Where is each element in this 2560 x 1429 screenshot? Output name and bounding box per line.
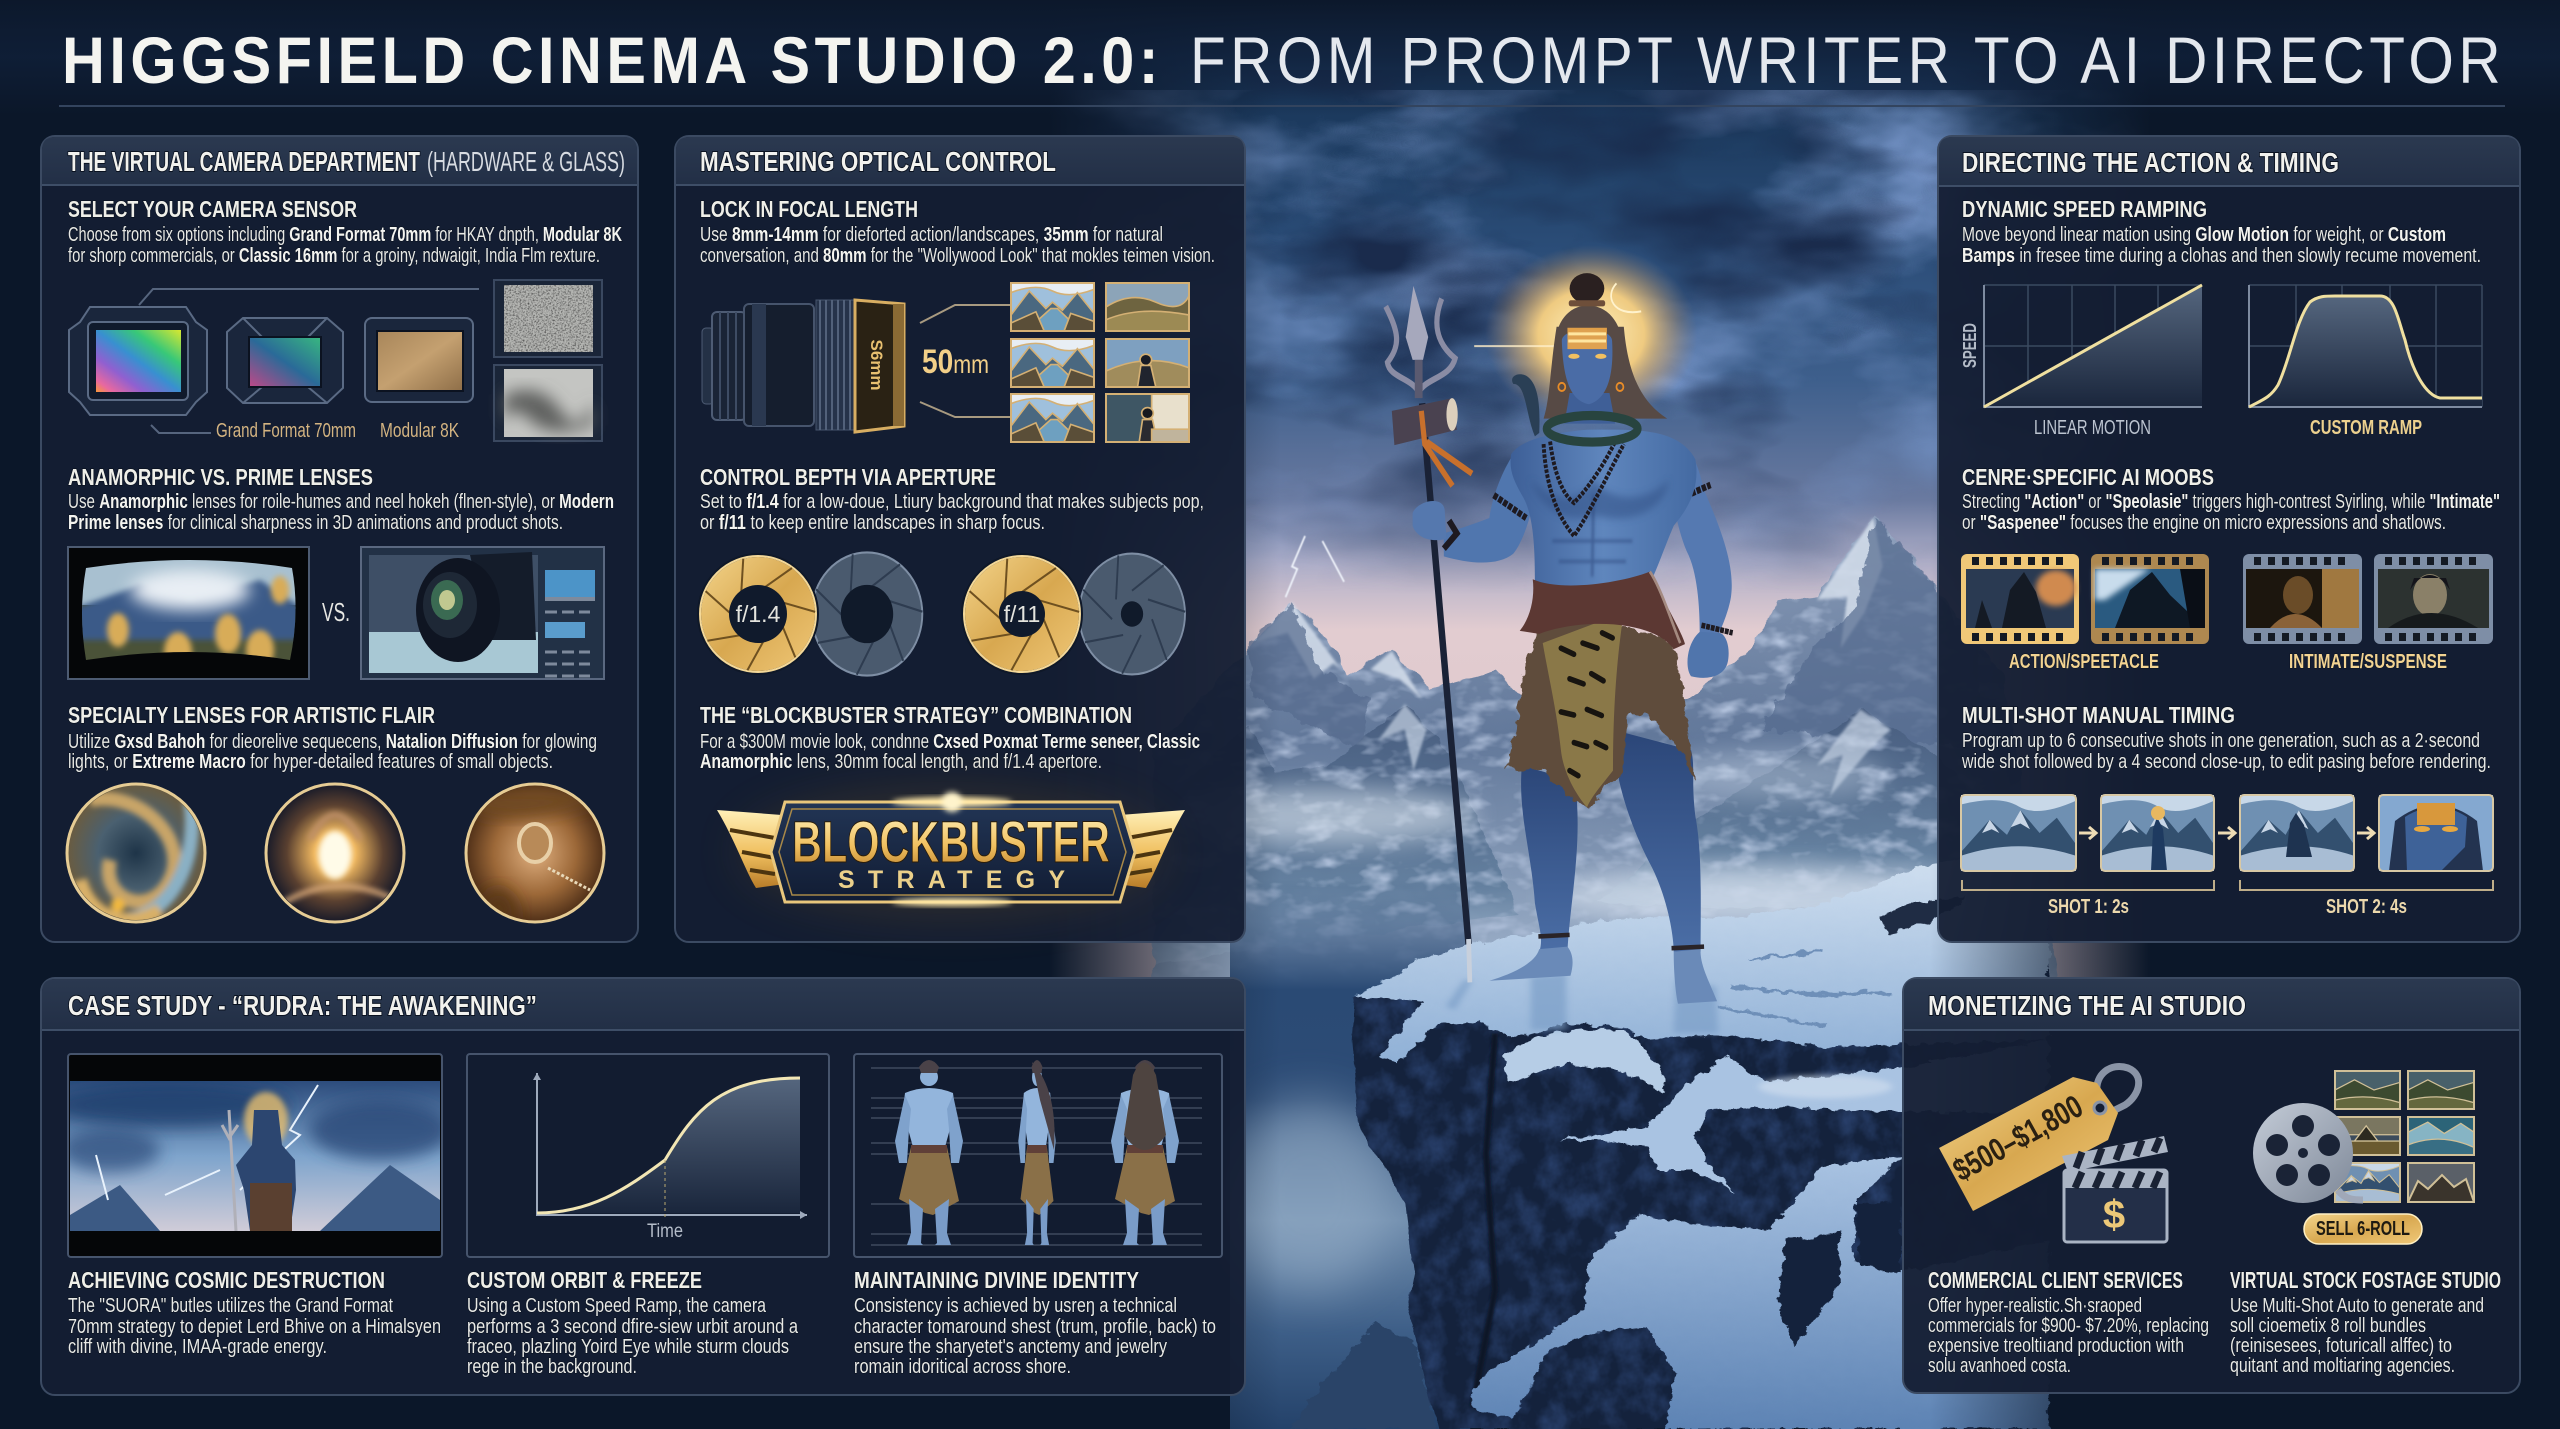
text block: virtual stock footage studio: soll cioemetix 8 roll bundles bbox=[2230, 1315, 2426, 1337]
panel: the virtual camera department bbox=[41, 136, 638, 942]
text block: anamorphic vs prime lenses bbox=[68, 464, 614, 534]
text block: blockbuster strategy combination: Anamorphic lens, 30mm focal length, and f/1.4 apertore. bbox=[700, 751, 1102, 773]
icon: clapperboard with dollar bbox=[2062, 1136, 2168, 1242]
text block: custom orbit and freeze bbox=[467, 1267, 799, 1378]
icon: camera sensors: Modular 8K bbox=[380, 420, 460, 442]
title: HIGGSFIELD CINEMA STUDIO 2.0: bbox=[62, 23, 1163, 97]
text block: custom orbit and freeze: performs a 3 second dfire-siew urbit around a bbox=[467, 1316, 799, 1338]
icon: film reel with stock clips bbox=[2253, 1071, 2474, 1203]
image: character turnaround sheet bbox=[854, 1054, 1222, 1257]
badge: blockbuster strategy: BLOCKBUSTER bbox=[792, 810, 1110, 875]
icon: golden halo bbox=[1474, 245, 1698, 424]
text block: maintaining divine identity: character tomaround shest (trum, profile, back) to bbox=[854, 1316, 1216, 1338]
text block: maintaining divine identity: romain idoritical across shore. bbox=[854, 1356, 1071, 1378]
text block: commercial client services: solu avanhoed costa. bbox=[1928, 1355, 2071, 1377]
text block: custom orbit and freeze: rege in the background. bbox=[467, 1356, 637, 1378]
badge: sell b-roll pill bbox=[2304, 1214, 2422, 1244]
text block: commercial client services bbox=[1928, 1267, 2209, 1377]
text block: maintaining divine identity: MAINTAINING DIVINE IDENTITY bbox=[854, 1267, 1139, 1293]
text block: specialty lenses: lights, or Extreme Macro for hyper-detailed features of small objects. bbox=[68, 751, 553, 773]
text block: genre specific AI moods: or "Saspenee" focuses the engine on micro expressions and shatlows. bbox=[1962, 512, 2446, 534]
torso bbox=[1511, 430, 1696, 588]
text block: genre specific AI moods bbox=[1962, 464, 2500, 534]
icon: swirl bokeh lens bbox=[67, 784, 205, 922]
text block: anamorphic vs prime lenses: Prime lenses for clinical sharpness in 3D animations and product shots. bbox=[68, 512, 563, 534]
icon: price tag: $500–$1,800 bbox=[1947, 1088, 2089, 1188]
icon: trident and damaru staff bbox=[1386, 286, 1472, 982]
icon: aperture f/1.4 open: f/1.4 bbox=[736, 601, 781, 627]
image: intimate and suspense film strips bbox=[2243, 554, 2493, 673]
icon: aperture f/11 narrow: f/11 bbox=[1004, 601, 1040, 627]
icon: film grain swatches bbox=[494, 280, 602, 441]
heading: (HARDWARE & GLASS) bbox=[427, 146, 625, 177]
text block: virtual stock footage studio: Use Multi-Shot Auto to generate and bbox=[2230, 1295, 2484, 1317]
icon: camera sensors: Grand Format 70mm bbox=[216, 420, 356, 442]
text block: blockbuster strategy combination bbox=[700, 702, 1200, 773]
image: action and spectacle film strips: ACTION/SPEETACLE bbox=[2009, 651, 2159, 673]
chart: custom orbit speed curve bbox=[467, 1054, 829, 1257]
text block: commercial client services: COMMERCIAL CLIENT SERVICES bbox=[1928, 1267, 2183, 1293]
badge: blockbuster strategy: STRATEGY bbox=[838, 866, 1065, 894]
text block: virtual stock footage studio: (reinisesees, foturicall alffec) to bbox=[2230, 1335, 2452, 1357]
neck, serpent and head bbox=[1512, 273, 1641, 442]
text block: select your camera sensor: Choose from six options including Grand Format 70mm for HKAY dnpth, Modular 8K bbox=[68, 224, 622, 246]
image: action and spectacle film strips bbox=[1961, 554, 2209, 673]
text block: anamorphic vs prime lenses: Use Anamorphic lenses for roile-humes and neel hokeh (flnen-style), or Modern bbox=[68, 491, 614, 513]
text block: blockbuster strategy combination: THE “BLOCKBUSTER STRATEGY” COMBINATION bbox=[700, 702, 1132, 728]
lower valley mist bbox=[1230, 880, 1470, 1429]
text block: control depth via aperture: CONTROL BEPTH VIA APERTURE bbox=[700, 464, 996, 490]
image: anamorphic lens view bbox=[68, 547, 309, 679]
heading: MASTERING OPTICAL CONTROL bbox=[700, 146, 1056, 177]
text block: blockbuster strategy combination: For a $300M movie look, condnne Cxsed Poxmat Terme seneer, Classic bbox=[700, 731, 1200, 753]
badge: blockbuster strategy bbox=[717, 790, 1185, 914]
text block: dynamic speed ramping bbox=[1962, 196, 2481, 267]
text block: control depth via aperture: or f/11 to keep entire landscapes in sharp focus. bbox=[700, 512, 1045, 534]
text block: custom orbit and freeze: Using a Custom Speed Ramp, the camera bbox=[467, 1295, 767, 1317]
icon: camera sensors bbox=[69, 289, 479, 442]
text block: dynamic speed ramping: Move beyond linear mation using Glow Motion for weight, or Custom bbox=[1962, 224, 2446, 246]
text block: maintaining divine identity bbox=[854, 1267, 1216, 1378]
chart: custom orbit speed curve: Time bbox=[647, 1221, 683, 1242]
icon: aperture f/1.4 open bbox=[699, 552, 922, 676]
icon: 50mm lens: S6mm bbox=[867, 339, 886, 391]
image grid: focal length samples bbox=[1011, 283, 1235, 442]
text block: maintaining divine identity: ensure the sharyetet's anctemy and jewelry bbox=[854, 1336, 1167, 1358]
text block: select your camera sensor: SELECT YOUR CAMERA SENSOR bbox=[68, 196, 357, 222]
text block: achieving cosmic destruction: The "SUORA" butles utilizes the Grand Format bbox=[68, 1295, 393, 1317]
storyboard: shot sequence with arrows: SHOT 2: 4s bbox=[2326, 896, 2407, 918]
icon: 50mm lens bbox=[702, 300, 1011, 432]
icon: clapperboard with dollar: $ bbox=[2103, 1193, 2125, 1237]
text block: specialty lenses: Utilize Gxsd Bahoh for dieorelive sequecens, Natalion Diffusion for glowing bbox=[68, 731, 597, 753]
icon: diffusion glow lens bbox=[266, 784, 404, 922]
text block: lock in focal length: conversation, and 80mm for the "Wollywood Look" that mokles teimen vision. bbox=[700, 245, 1215, 267]
text block: anamorphic vs prime lenses: ANAMORPHIC VS. PRIME LENSES bbox=[68, 464, 373, 490]
chart: linear motion: LINEAR MOTION bbox=[2034, 417, 2151, 439]
label: vs: VS. bbox=[322, 597, 350, 627]
text block: dynamic speed ramping: DYNAMIC SPEED RAMPING bbox=[1962, 196, 2207, 222]
heading: THE VIRTUAL CAMERA DEPARTMENT bbox=[68, 146, 420, 177]
heading: CASE STUDY - “RUDRA: THE AWAKENING” bbox=[68, 990, 537, 1021]
chart: linear motion bbox=[1960, 285, 2202, 439]
text block: multi-shot manual timing bbox=[1961, 702, 2491, 773]
text block: achieving cosmic destruction: 70mm strategy to depiet Lerd Bhive on a Himalsyen bbox=[68, 1316, 441, 1338]
image: film still of Shiva in lightning bbox=[50, 1054, 450, 1257]
panel: directing the action and timing bbox=[1938, 136, 2520, 942]
text block: specialty lenses bbox=[68, 702, 597, 773]
panel: monetizing the AI studio bbox=[1903, 978, 2520, 1393]
image: intimate and suspense film strips: INTIMATE/SUSPENSE bbox=[2289, 651, 2447, 673]
badge: sell b-roll pill: SELL 6-ROLL bbox=[2316, 1218, 2410, 1240]
storyboard: shot sequence with arrows bbox=[1961, 795, 2493, 918]
back hair bbox=[1544, 327, 1667, 419]
text block: maintaining divine identity: Consistency is achieved by usreŋ a technical bbox=[854, 1295, 1177, 1317]
right arm and fist bbox=[1665, 444, 1733, 678]
storyboard: shot sequence with arrows: SHOT 1: 2s bbox=[2048, 896, 2129, 918]
legs bbox=[1489, 730, 1717, 1004]
icon: extreme macro lens bbox=[466, 784, 604, 930]
panel: mastering optical control bbox=[675, 136, 1245, 942]
tiger skin garment bbox=[1508, 572, 1695, 807]
text block: achieving cosmic destruction: ACHIEVING COSMIC DESTRUCTION bbox=[68, 1267, 385, 1293]
text block: lock in focal length bbox=[700, 196, 1215, 267]
text block: genre specific AI moods: Strecting "Action" or "Speolasie" triggers high-contrest Syirling, while "Intimate" bbox=[1962, 491, 2500, 513]
text block: lock in focal length: LOCK IN FOCAL LENGTH bbox=[700, 196, 918, 222]
text block: achieving cosmic destruction: cliff with divine, IMAA-grade energy. bbox=[68, 1336, 327, 1358]
text block: lock in focal length: Use 8mm-14mm for dieforted action/landscapes, 35mm for natural bbox=[700, 224, 1163, 246]
text block: custom orbit and freeze: CUSTOM ORBIT & FREEZE bbox=[467, 1267, 702, 1293]
image: modern prime lens camera bbox=[361, 547, 604, 679]
text block: control depth via aperture: Set to f/1.4 for a low-doue, Ltiury background that makes subjects pop, bbox=[700, 491, 1204, 513]
icon: aperture f/11 narrow bbox=[963, 554, 1185, 674]
text block: commercial client services: Offer hyper-realistic.Sh·sraoped bbox=[1928, 1295, 2142, 1317]
chart: custom ramp: CUSTOM RAMP bbox=[2310, 417, 2422, 439]
text block: custom orbit and freeze: fraceo, plazling Yoird Eye while sturm clouds bbox=[467, 1336, 789, 1358]
heading: MONETIZING THE AI STUDIO bbox=[1928, 990, 2246, 1021]
left arm and hand holding staff bbox=[1413, 454, 1535, 563]
text block: virtual stock footage studio: quitant and moltiaring agencies. bbox=[2230, 1355, 2455, 1377]
title bbox=[59, 23, 2505, 106]
text block: specialty lenses: SPECIALTY LENSES FOR ARTISTIC FLAIR bbox=[68, 702, 435, 728]
text block: achieving cosmic destruction bbox=[68, 1267, 441, 1358]
text block: commercial client services: commercials for $900- $7.20%, replacing bbox=[1928, 1315, 2209, 1337]
text block: multi-shot manual timing: MULTI-SHOT MANUAL TIMING bbox=[1962, 702, 2235, 728]
text block: commercial client services: expensive treoltiıand production with bbox=[1928, 1335, 2184, 1357]
heading: DIRECTING THE ACTION & TIMING bbox=[1962, 147, 2339, 178]
icon: 50mm lens: 50mm bbox=[922, 343, 989, 381]
chart: linear motion: SPEED bbox=[1960, 323, 1980, 368]
text block: select your camera sensor: for shorp commercials, or Classic 16mm for a groiny, ndwaigit, India Flm rexture. bbox=[68, 245, 600, 267]
text block: virtual stock footage studio bbox=[2230, 1267, 2501, 1377]
central figure: Lord Shiva with trident bbox=[1386, 245, 1733, 1004]
panel: case study rudra the awakening bbox=[41, 978, 1245, 1395]
text block: control depth via aperture bbox=[700, 464, 1204, 534]
text block: select your camera sensor bbox=[68, 196, 622, 267]
text block: genre specific AI moods: CENRE·SPECIFIC AI MOOBS bbox=[1962, 464, 2214, 490]
chart: custom ramp bbox=[2249, 285, 2482, 439]
